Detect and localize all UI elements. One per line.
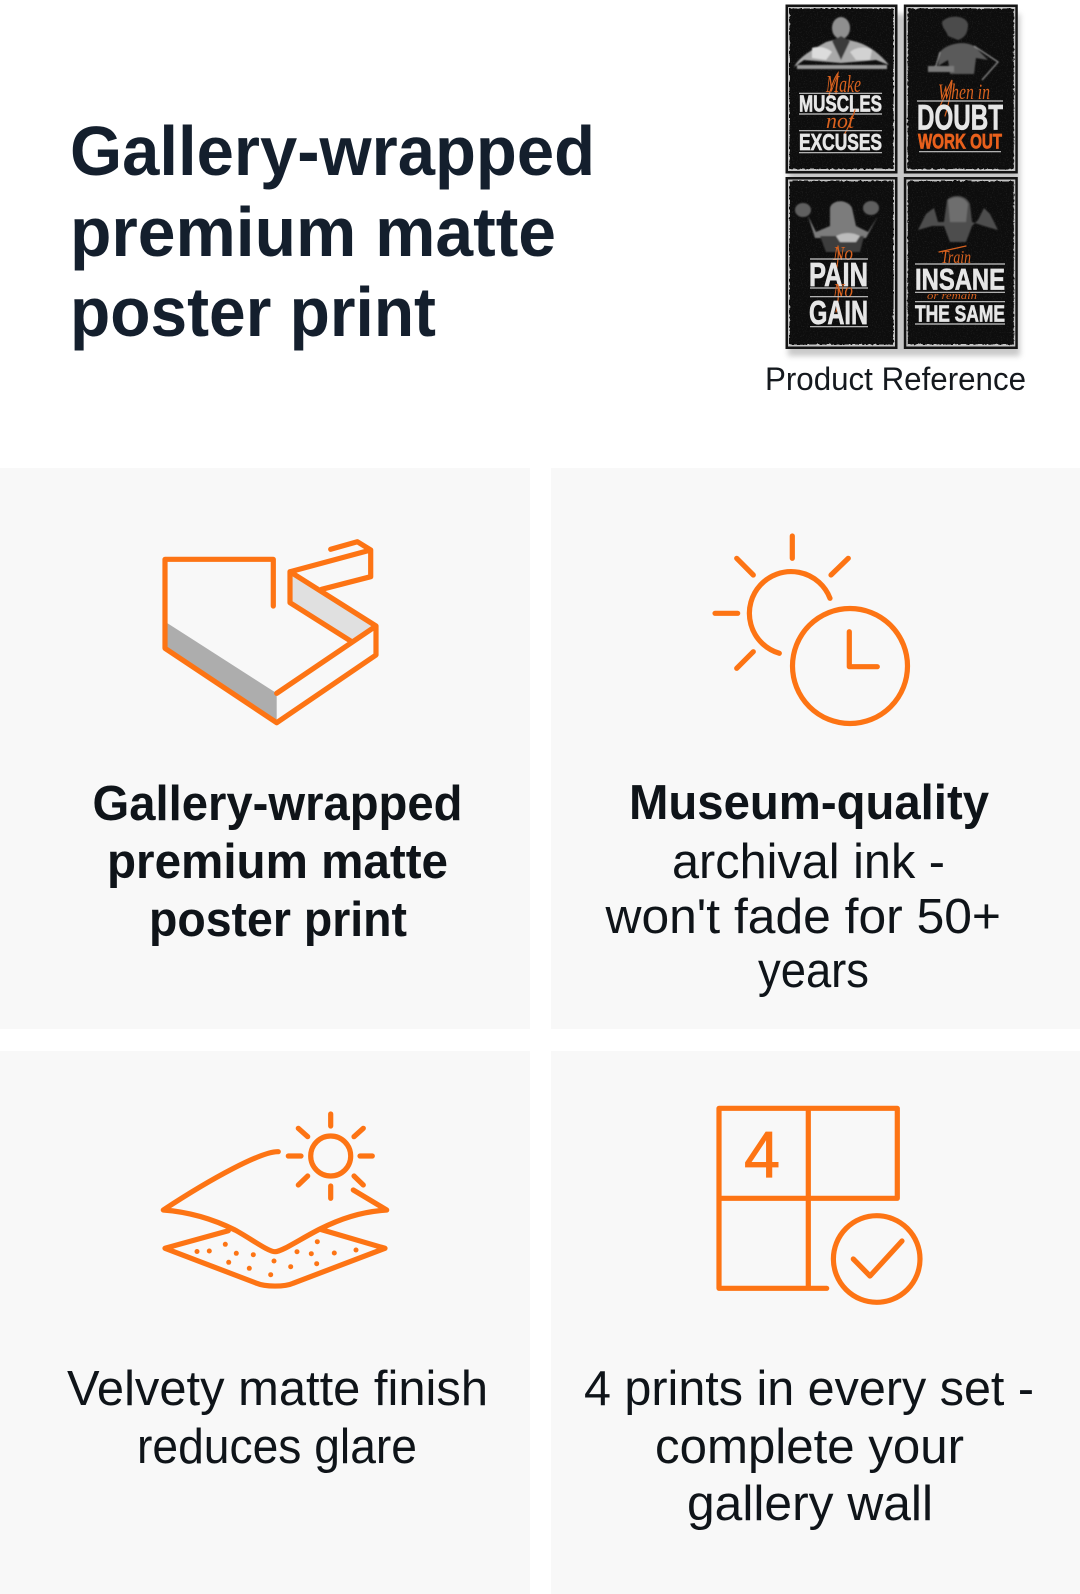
text: museum-quality: archival ink - <box>672 835 945 889</box>
text: 4 prints: gallery wall <box>687 1477 933 1531</box>
poster: make muscles not excuses: not <box>826 108 855 133</box>
product reference caption: Product Reference <box>765 361 1026 397</box>
poster: train insane or remain the same: INSANE <box>915 263 1005 296</box>
icon: matte layers with sun <box>163 1114 387 1286</box>
poster: no pain no gain: No <box>832 280 853 302</box>
text: museum-quality: years <box>758 944 869 998</box>
poster: train insane or remain the same: THE SAME <box>915 301 1005 327</box>
poster: train insane or remain the same: or remain <box>927 291 977 302</box>
poster: train insane or remain the same <box>904 177 1018 349</box>
text: 4 prints: 4 prints in every set - <box>584 1362 1034 1416</box>
title <box>70 112 595 351</box>
text: gallery-wrapped: poster print <box>149 893 407 947</box>
text: museum-quality: won't fade for 50+ <box>604 890 1001 944</box>
poster: no pain no gain: PAIN <box>809 256 868 293</box>
poster: no pain no gain: GAIN <box>809 294 868 331</box>
text: gallery-wrapped: Gallery-wrapped <box>92 777 462 831</box>
panel: velvety matte <box>0 1051 530 1594</box>
text: velvety matte: reduces glare <box>137 1420 417 1474</box>
icon: folded canvas corner <box>165 542 376 723</box>
poster: make muscles not excuses: EXCUSES <box>799 129 882 155</box>
text: velvety matte <box>67 1362 488 1474</box>
text: gallery-wrapped <box>92 777 462 947</box>
poster: train insane or remain the same: Train <box>941 247 971 267</box>
text: velvety matte: Velvety matte finish <box>67 1362 488 1416</box>
title: Gallery-wrapped <box>70 112 595 190</box>
icon: four-panel grid with check: 4 <box>744 1118 780 1192</box>
panel: 4 prints <box>551 1051 1080 1594</box>
poster: make muscles not excuses <box>786 4 898 174</box>
icon: sun and clock <box>715 536 908 724</box>
text: 4 prints: complete your <box>655 1420 964 1474</box>
text: museum-quality: Museum-quality <box>629 776 989 830</box>
panel: museum-quality <box>551 468 1080 1029</box>
poster: when in doubt work out: When in <box>938 79 990 104</box>
poster: make muscles not excuses: MUSCLES <box>799 91 882 117</box>
icon: four-panel grid with check <box>719 1108 920 1302</box>
poster: when in doubt work out <box>904 4 1018 174</box>
panel: gallery-wrapped <box>0 468 530 1029</box>
text: museum-quality <box>604 776 1001 998</box>
poster: when in doubt work out: DOUBT <box>917 98 1003 137</box>
text: gallery-wrapped: premium matte <box>107 835 448 889</box>
title: premium matte <box>70 193 556 271</box>
poster: when in doubt work out: WORK OUT <box>918 130 1002 153</box>
poster: no pain no gain <box>786 177 898 349</box>
text: 4 prints <box>584 1362 1034 1531</box>
title: poster print <box>70 273 436 351</box>
poster: no pain no gain: No <box>832 243 853 265</box>
poster: make muscles not excuses: Make <box>825 72 861 98</box>
product reference poster set <box>786 4 1020 356</box>
